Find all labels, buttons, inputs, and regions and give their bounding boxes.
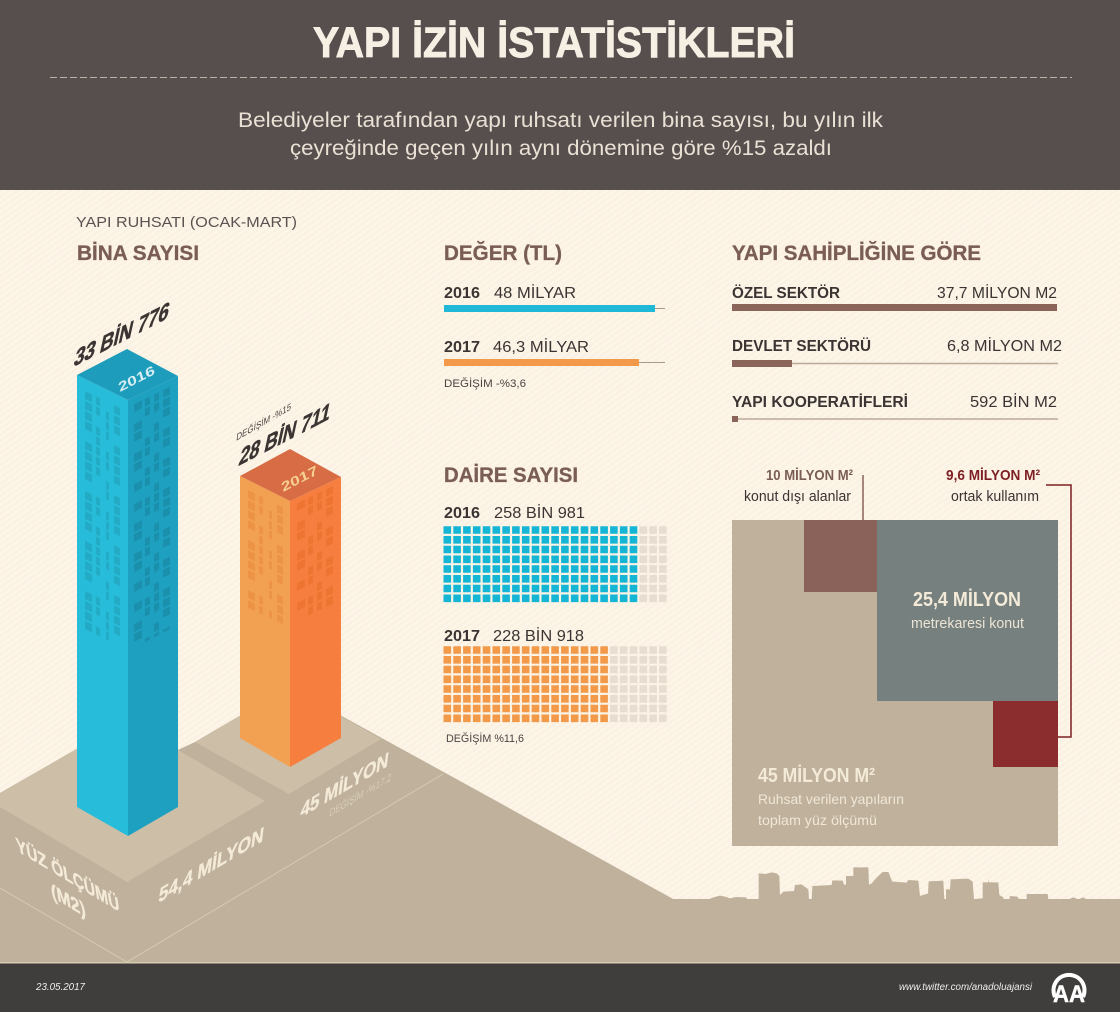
cooperatives row — [732, 392, 1058, 422]
heading: yapı sahipliğine göre: YAPI SAHİPLİĞİNE GÖRE — [732, 241, 981, 265]
apartments 2017 waffle — [444, 626, 668, 718]
public sector row: DEVLET SEKTÖRÜ — [732, 336, 871, 355]
non-residential block — [804, 520, 877, 592]
value change: DEĞİŞİM -%3,6 — [444, 377, 526, 390]
value: 28 BİN 711: 28 BİN 711 — [237, 397, 334, 472]
callout: non-residential — [744, 467, 863, 520]
year label 2016: 2016 — [116, 362, 157, 395]
panel: ownership — [732, 241, 1062, 422]
isometric ground with city skyline — [0, 687, 1120, 963]
value 2016 row: 48 MİLYAR — [494, 283, 576, 302]
total area label — [758, 764, 904, 828]
private sector row: 37,7 MİLYON M2 — [937, 283, 1057, 302]
icon: AA logo: AA — [1053, 981, 1085, 1008]
header panel — [0, 0, 1120, 190]
building 2016 — [77, 349, 178, 836]
panel: apartments — [444, 464, 668, 745]
value 2017 row: 2017 — [444, 339, 480, 356]
area unit: (M2) — [49, 880, 87, 922]
area breakdown chart — [732, 520, 1058, 846]
title: YAPI İZİN İSTATİSTİKLERİ — [313, 19, 795, 67]
value 2016 row: 2016 — [444, 285, 480, 302]
subtitle: çeyreğinde geçen yılın aynı dönemine göre %15 azaldı — [290, 136, 832, 160]
building 2017 — [240, 449, 341, 767]
value 2017 row: 46,3 MİLYAR — [493, 337, 589, 356]
total area label: 45 MİLYON M² — [758, 764, 875, 787]
area change: DEĞİŞİM -%17,2 — [329, 770, 392, 820]
private sector row: ÖZEL SEKTÖR — [732, 283, 840, 302]
callout: common use: 9,6 MİLYON M² — [946, 467, 1040, 484]
cooperatives row: YAPI KOOPERATİFLERİ — [732, 393, 908, 411]
subtitle: Belediyeler tarafından yapı ruhsatı verilen bina sayısı, bu yılın ilk — [238, 108, 883, 132]
change: -%15: DEĞİŞİM -%15 — [236, 399, 292, 444]
panel: value — [444, 241, 665, 390]
value 2016 row — [444, 283, 665, 312]
public sector row: 6,8 MİLYON M2 — [947, 336, 1062, 355]
twitter address: www.twitter.com/anadoluajansi — [899, 982, 1033, 993]
area 2017 value: 45 MİLYON — [299, 748, 390, 823]
value: 33 BİN 776: 33 BİN 776 — [72, 297, 172, 373]
area label: YÜZ ÖLÇÜMÜ — [14, 833, 121, 917]
total area label: toplam yüz ölçümü — [758, 812, 877, 828]
residential block: metrekaresi konut — [911, 615, 1025, 632]
value 2017 row — [444, 337, 665, 366]
apartments 2016 waffle — [444, 503, 668, 598]
callout: common use — [946, 467, 1071, 737]
apartments 2017 waffle: 228 BİN 918 — [493, 626, 584, 645]
apartments change: DEĞİŞİM %11,6 — [446, 732, 524, 745]
section note: YAPI RUHSATI (OCAK-MART) — [76, 214, 297, 231]
apartments 2016 waffle: 2016 — [444, 505, 480, 522]
footer — [0, 962, 1120, 1012]
heading: bina sayısı: BİNA SAYISI — [77, 242, 199, 265]
residential block — [877, 520, 1058, 701]
common use block — [993, 701, 1058, 767]
heading: değer: DEĞER (TL) — [444, 241, 562, 265]
panel: building count heading — [76, 214, 297, 265]
area 2016 value: 54,4 MİLYON — [157, 823, 265, 908]
year label 2017: 2017 — [279, 462, 320, 495]
total area label: Ruhsat verilen yapıların — [758, 791, 904, 807]
apartments 2016 waffle: 258 BİN 981 — [494, 503, 585, 522]
private sector row — [732, 283, 1057, 311]
residential block: 25,4 MİLYON — [913, 588, 1021, 611]
cooperatives row: 592 BİN M2 — [970, 392, 1057, 411]
public sector row — [732, 336, 1062, 367]
callout: common use: ortak kullanım — [951, 489, 1039, 505]
heading: daire sayısı: DAİRE SAYISI — [444, 464, 578, 487]
callout: non-residential: konut dışı alanlar — [744, 489, 851, 505]
apartments 2017 waffle: 2017 — [444, 628, 480, 645]
callout: non-residential: 10 MİLYON M² — [766, 467, 853, 484]
date: 23.05.2017 — [35, 982, 85, 993]
